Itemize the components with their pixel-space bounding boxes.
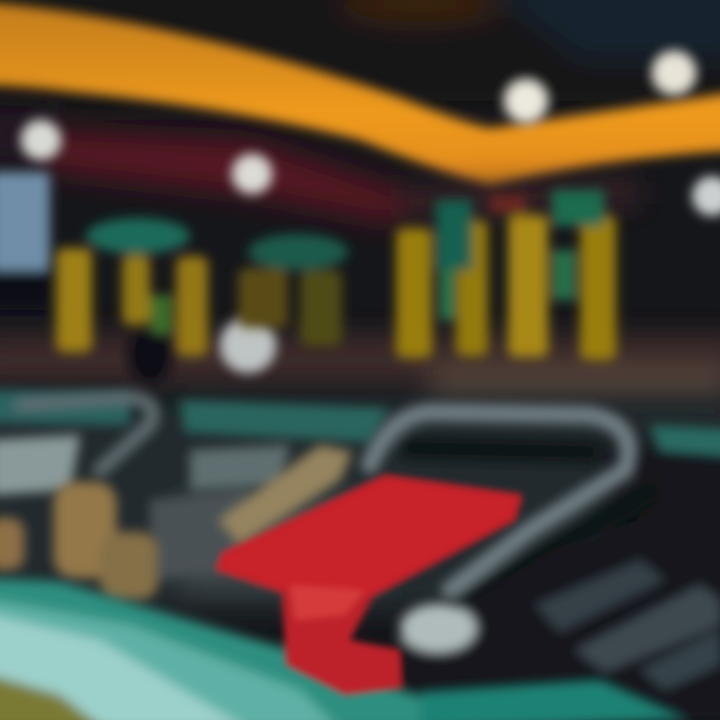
green yellow screen columns (56, 190, 616, 360)
maroon wall band (0, 105, 720, 403)
gold coin stacks (0, 445, 352, 600)
ceiling (0, 0, 720, 110)
teal foreground desk (0, 578, 690, 720)
lights (21, 51, 720, 373)
teal counter stripes (0, 390, 720, 580)
figure silhouette (90, 327, 185, 490)
orange ceiling band (0, 2, 720, 186)
red ribbon shape (215, 475, 522, 695)
curved grey bars (20, 398, 650, 600)
blue side screen (0, 172, 50, 310)
dark keyboards lower right (380, 490, 720, 720)
lower desk base (0, 400, 720, 620)
